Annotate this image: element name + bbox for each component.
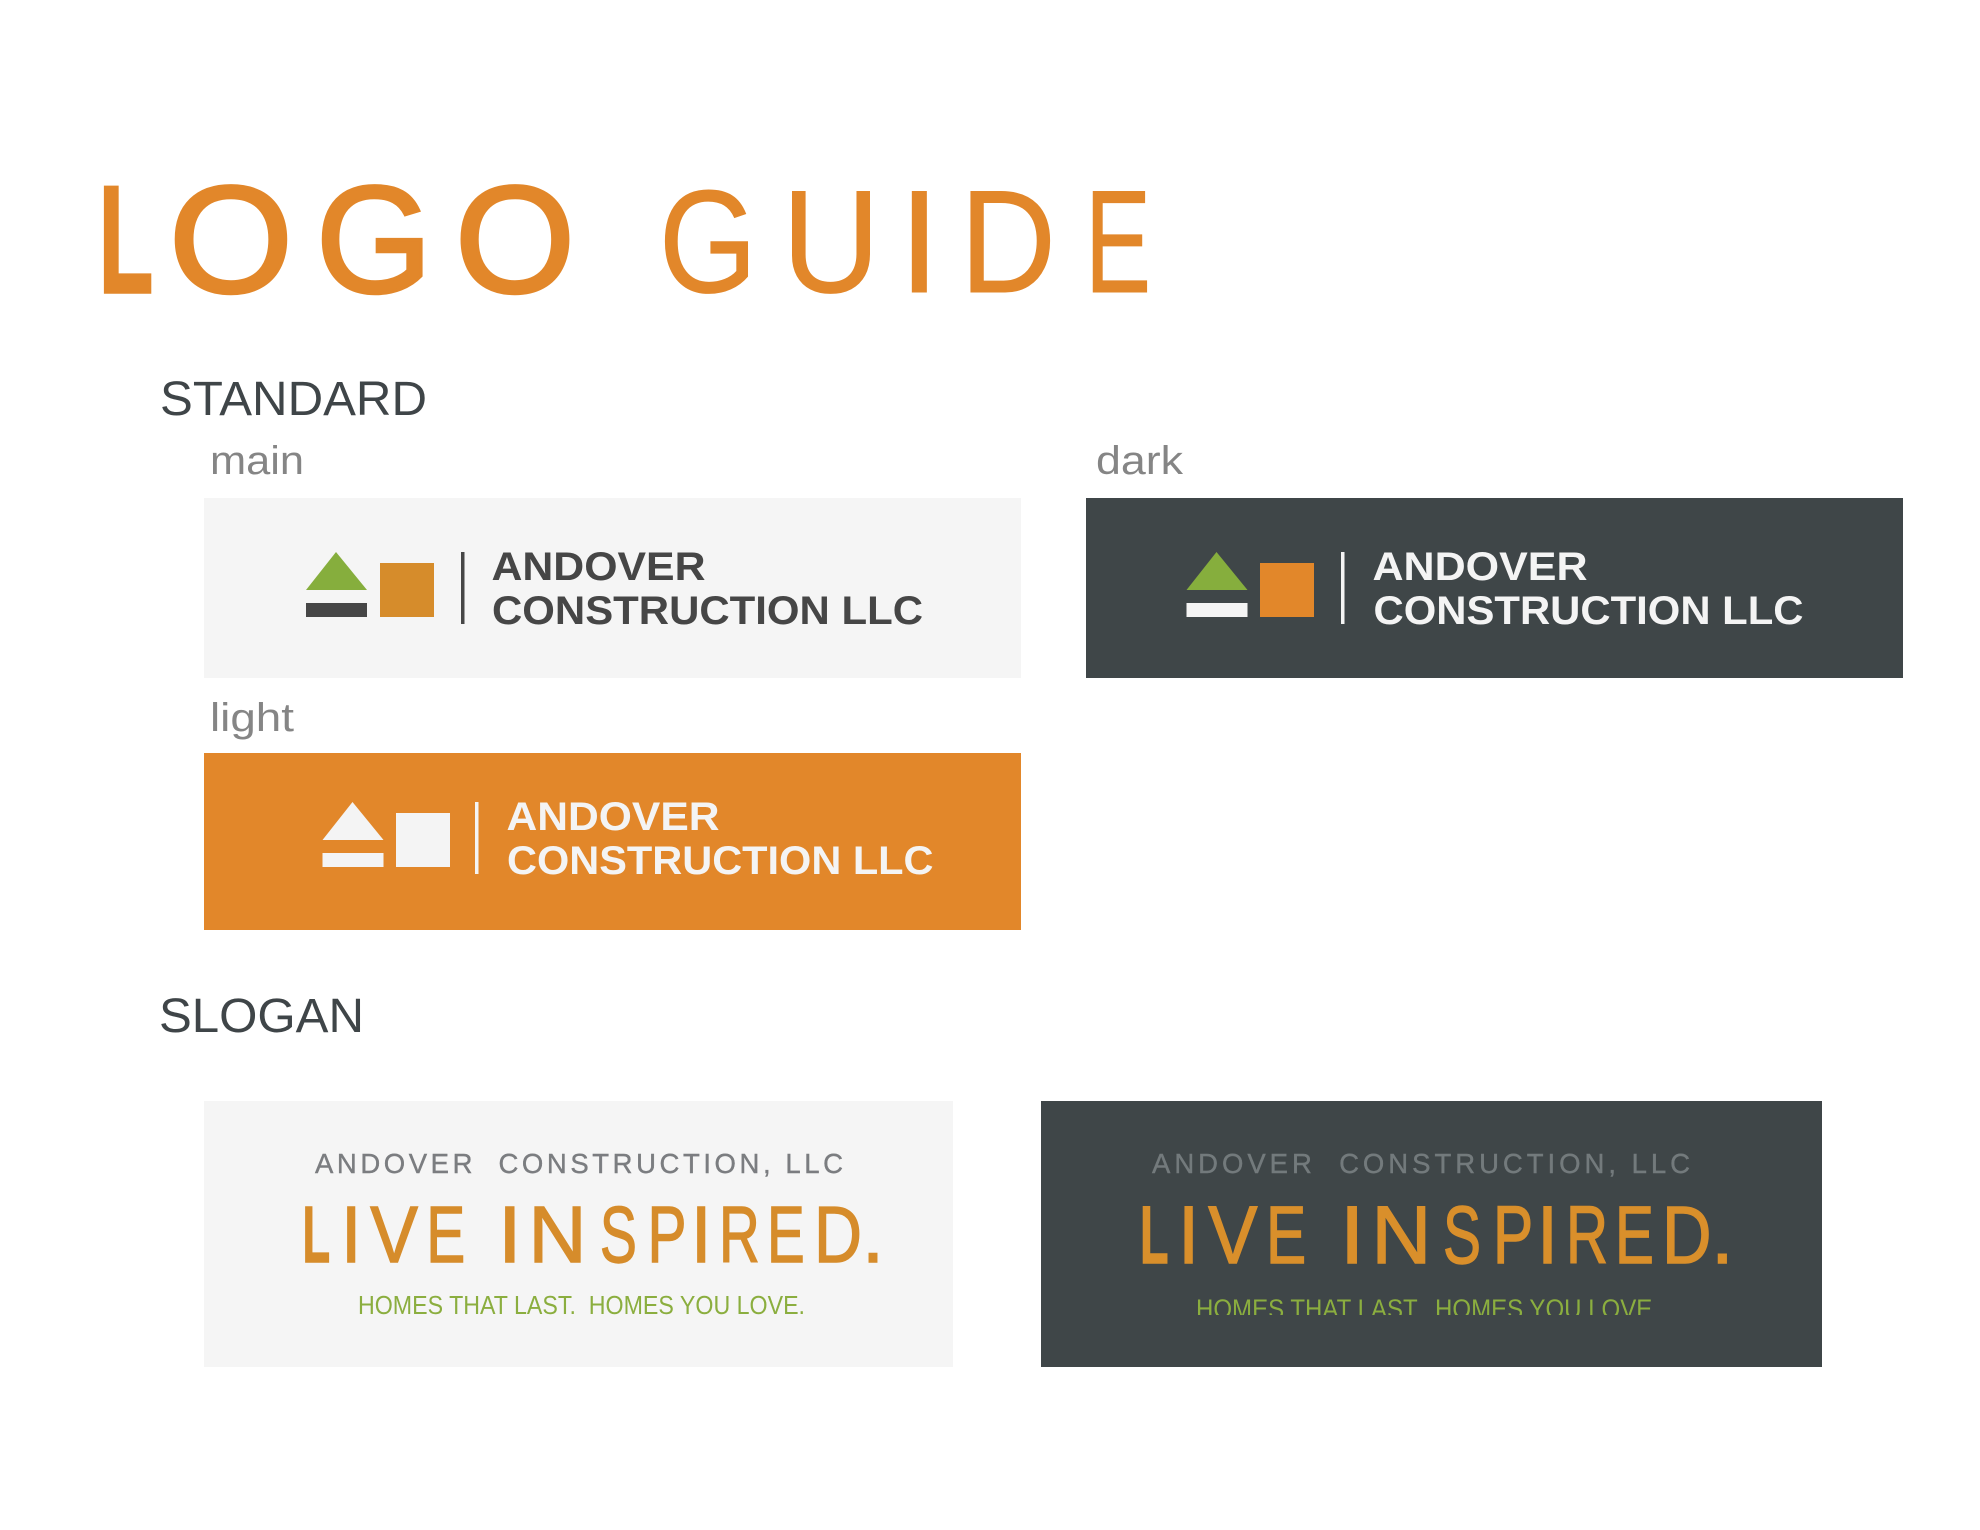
panel: slogan light: [204, 1101, 953, 1367]
slogan: I: [691, 1190, 711, 1279]
slogan: L: [302, 1190, 330, 1279]
slogan: S: [1443, 1190, 1481, 1281]
slogan: R: [719, 1190, 760, 1279]
slogan: L: [1140, 1190, 1168, 1281]
slogan: I: [1537, 1190, 1558, 1281]
panel: dark logo: [1086, 498, 1903, 678]
title: [99, 155, 1151, 325]
title: U: [782, 160, 880, 323]
title: O: [455, 155, 575, 325]
title: G: [659, 160, 757, 323]
slogan: E: [1615, 1190, 1654, 1281]
slogan: I: [341, 1190, 361, 1279]
tagline clipped: HOMES THAT LAST. HOMES YOU LOVE.: [1196, 1294, 1659, 1324]
divider: [461, 552, 464, 624]
company name: ANDOVER CONSTRUCTION, LLC: [1152, 1148, 1690, 1179]
divider: [475, 802, 478, 874]
slogan: P: [1493, 1190, 1533, 1281]
company name: ANDOVER CONSTRUCTION, LLC: [315, 1148, 843, 1179]
panel: light logo: [204, 753, 1021, 930]
icon: white square: [396, 813, 450, 867]
logo guide page: [104, 184, 1903, 1367]
title: G: [316, 155, 432, 325]
logo text: ANDOVER: [492, 545, 706, 589]
logo text: CONSTRUCTION LLC: [492, 589, 923, 633]
slogan: .: [1711, 1190, 1734, 1281]
slogan: I: [498, 1190, 522, 1279]
icon: white bar: [322, 853, 384, 867]
slogan: E: [1266, 1190, 1306, 1281]
slogan: D: [1662, 1190, 1712, 1281]
divider: [1341, 552, 1344, 624]
title: E: [1085, 160, 1151, 323]
logo text: ANDOVER: [506, 795, 720, 839]
logo text: [506, 795, 934, 883]
slogan: R: [1566, 1190, 1608, 1281]
slogan: N: [528, 1190, 586, 1279]
tagline: HOMES THAT LAST. HOMES YOU LOVE.: [358, 1290, 805, 1320]
slogan: .: [862, 1190, 884, 1279]
logo text: [1372, 545, 1804, 633]
slogan: I: [1340, 1190, 1364, 1281]
icon: white triangle: [322, 802, 384, 840]
title: O: [169, 155, 293, 325]
heading: slogan: SLOGAN: [159, 990, 364, 1043]
icon: white bar: [1186, 603, 1248, 617]
label: light: light: [210, 696, 294, 740]
icon: dark bar: [306, 603, 367, 617]
icon: ochre square: [380, 563, 434, 617]
panel: main logo: [204, 498, 1021, 678]
icon: green triangle: [1186, 552, 1248, 590]
slogan: I: [1178, 1190, 1199, 1281]
heading: standard: STANDARD: [160, 373, 427, 426]
slogan: P: [648, 1190, 686, 1279]
slogan: N: [1371, 1190, 1431, 1281]
logo text: CONSTRUCTION LLC: [507, 839, 934, 883]
logo text: [492, 545, 923, 633]
label: main: main: [210, 439, 304, 483]
slogan: V: [370, 1190, 419, 1279]
title: L: [99, 155, 153, 325]
slogan: D: [814, 1190, 862, 1279]
panel: slogan dark: [1041, 1101, 1822, 1367]
slogan: E: [767, 1190, 805, 1279]
icon: orange square: [1260, 563, 1314, 617]
logo text: CONSTRUCTION LLC: [1374, 589, 1804, 633]
title: I: [898, 160, 940, 323]
slogan: S: [600, 1190, 637, 1279]
label: dark: dark: [1096, 439, 1184, 483]
title: D: [960, 160, 1056, 323]
slogan: V: [1208, 1190, 1258, 1281]
slogan: E: [426, 1190, 465, 1279]
logo text: ANDOVER: [1372, 545, 1588, 589]
icon: green triangle: [306, 552, 367, 590]
